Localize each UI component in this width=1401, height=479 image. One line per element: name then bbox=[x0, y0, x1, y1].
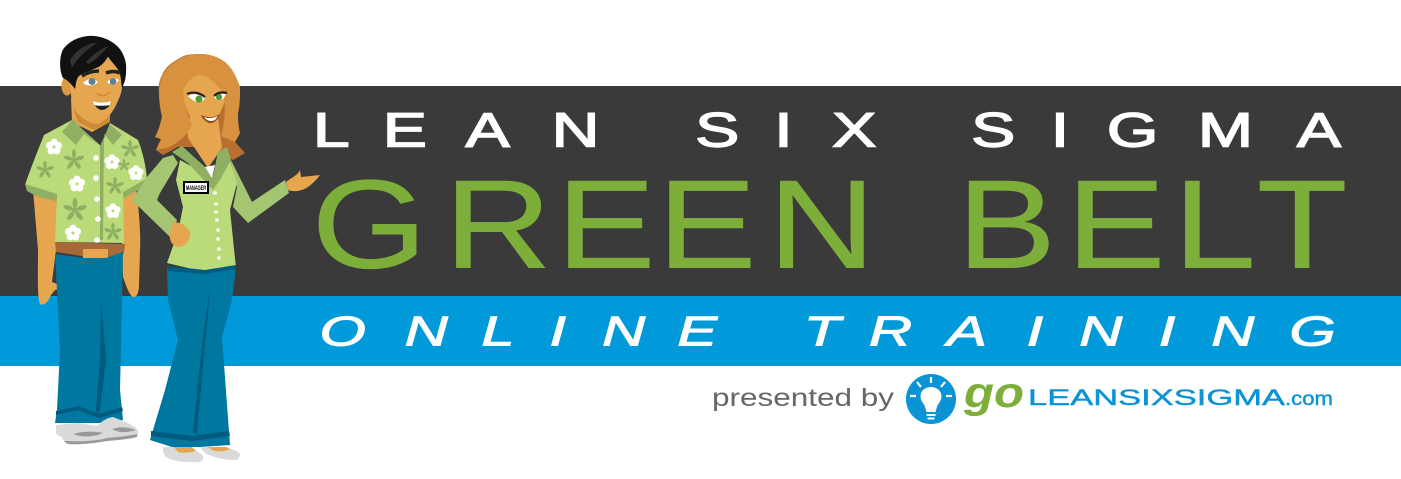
woman jeans bbox=[150, 267, 236, 447]
man collar and cuffs bbox=[62, 119, 122, 240]
woman head bbox=[183, 68, 226, 130]
man jeans bbox=[55, 252, 123, 423]
man right arm bbox=[120, 188, 140, 297]
man neck bbox=[71, 98, 110, 132]
man shoes bbox=[56, 417, 138, 444]
man jeans creases bbox=[56, 300, 123, 418]
man hair bbox=[60, 36, 126, 89]
man shoe soles bbox=[62, 427, 137, 444]
name badge: manager bbox=[183, 181, 209, 194]
heading: Lean Six Sigma: LEAN SIX SIGMA bbox=[313, 104, 1342, 157]
man mouth bbox=[93, 101, 111, 110]
dark title band bbox=[0, 86, 1401, 296]
woman left sleeve bbox=[132, 155, 178, 237]
man chin shadow bbox=[73, 108, 110, 130]
woman jacket bbox=[167, 150, 237, 272]
blue subtitle band bbox=[0, 296, 1401, 366]
subtitle: Online Training: ONLINE TRAINING bbox=[320, 307, 1336, 355]
presented by text: presented by bbox=[712, 384, 895, 412]
man hair highlights bbox=[70, 42, 108, 68]
woman hand bbox=[286, 170, 320, 191]
woman eyes bbox=[187, 92, 227, 102]
woman lapels bbox=[172, 146, 231, 190]
man eyes and brows bbox=[82, 71, 120, 86]
man left arm bbox=[33, 190, 62, 305]
woman buttons bbox=[213, 191, 221, 260]
woman shoes bbox=[163, 447, 203, 462]
man shirt bbox=[25, 120, 147, 243]
woman blouse bbox=[205, 165, 215, 178]
woman smile bbox=[201, 114, 220, 123]
character: woman bbox=[132, 54, 320, 462]
man belt bbox=[55, 242, 125, 259]
logo: leansixsigma: LEANSIXSIGMA bbox=[1028, 385, 1285, 410]
logo: go: go bbox=[963, 369, 1024, 417]
name badge: manager: MANAGER bbox=[186, 186, 206, 192]
logo: domain suffix: .com bbox=[1285, 389, 1333, 410]
woman right sleeve bbox=[230, 158, 289, 223]
logo icon: light bulb bbox=[906, 374, 956, 424]
woman jeans shading bbox=[151, 265, 236, 441]
woman hair front bbox=[155, 54, 240, 150]
woman neck bbox=[186, 118, 222, 168]
character: man bbox=[25, 36, 148, 444]
woman hair back bbox=[155, 54, 245, 160]
man ear bbox=[62, 76, 72, 96]
logo wordmark bbox=[963, 369, 1333, 417]
woman hand on hip bbox=[170, 222, 190, 247]
heading: Green Belt: GREEN BELT bbox=[312, 154, 1348, 295]
man head bbox=[71, 55, 122, 123]
man shirt flowers bbox=[36, 139, 144, 243]
man nose bbox=[97, 92, 110, 96]
